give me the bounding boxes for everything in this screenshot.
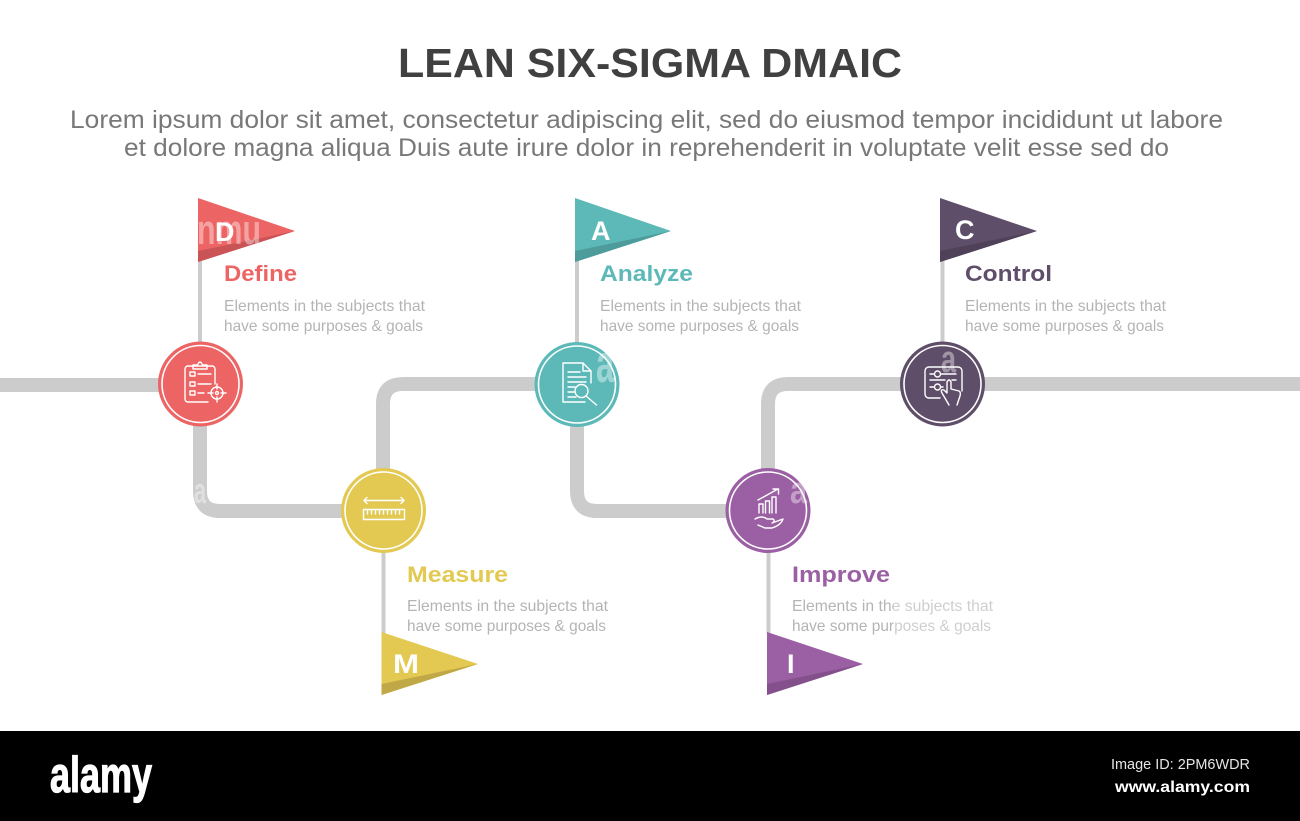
step: Measure (341, 468, 609, 695)
flag: D: nmu (197, 206, 261, 253)
subtitle text (70, 106, 1223, 162)
description: Define: Elements in the subjects that (224, 298, 426, 315)
watermark letter: Improve: a (790, 470, 808, 512)
flag: D: D (215, 217, 234, 247)
step: Control (900, 198, 1167, 426)
footer logo: alamy (50, 747, 152, 803)
watermark letter: Control: a (941, 339, 957, 381)
circle: Measure (341, 468, 426, 553)
heading: Measure: Measure (407, 562, 508, 587)
flag: C (940, 198, 1037, 262)
description: Measure (407, 598, 609, 635)
flag: C: C (955, 215, 974, 245)
description: Measure: Elements in the subjects that (407, 598, 609, 615)
heading: Improve: Improve (792, 562, 890, 587)
circle: Improve (726, 468, 810, 553)
description: Analyze: Elements in the subjects that (600, 298, 802, 315)
flag: M (382, 632, 478, 695)
faded watermark patch over Improve text (893, 597, 995, 637)
step: Analyze (534, 198, 802, 427)
description: Define: have some purposes & goals (224, 318, 423, 335)
icon: ruler with arrow (364, 498, 404, 520)
icon: touch control panel (925, 367, 962, 405)
description: Define (224, 298, 426, 335)
flag: D (197, 198, 295, 262)
footer band (0, 731, 1300, 821)
flag: I (767, 632, 863, 695)
watermark letter: Analyze: a (596, 334, 615, 394)
icon: growth chart on hand (755, 489, 783, 528)
circle: Define (158, 342, 243, 426)
flag: M: M (393, 649, 419, 679)
description: Control: Elements in the subjects that (965, 298, 1167, 315)
description: Analyze: have some purposes & goals (600, 318, 799, 335)
description: Measure: have some purposes & goals (407, 618, 606, 635)
description: Control: have some purposes & goals (965, 318, 1164, 335)
flag: A (575, 198, 671, 262)
flag: A: A (591, 216, 610, 246)
subtitle text: et dolore magna aliqua Duis aute irure dolor in reprehenderit in voluptate velit esse sed do (124, 134, 1169, 162)
description: Improve (792, 598, 994, 635)
description: Control (965, 298, 1167, 335)
heading: Analyze: Analyze (600, 261, 693, 286)
heading: Define: Define (224, 261, 297, 286)
description: Improve: Elements in the subjects that (792, 598, 994, 615)
circle: Control (900, 342, 985, 426)
watermark letter: on path: a (194, 470, 207, 511)
winding process path (0, 384, 1300, 511)
subtitle text: Lorem ipsum dolor sit amet, consectetur adipiscing elit, sed do eiusmod tempor incididunt ut labore (70, 106, 1223, 134)
icon: document with magnifier (563, 363, 596, 405)
icon: clipboard with target (185, 362, 226, 402)
footer url: www.alamy.com (1114, 779, 1250, 796)
step: Define (158, 198, 426, 426)
flag: I: I (787, 649, 795, 679)
title: LEAN SIX-SIGMA DMAIC (398, 40, 902, 86)
step: Improve (726, 468, 995, 695)
description: Improve: have some purposes & goals (792, 618, 991, 635)
heading: Control: Control (965, 261, 1052, 286)
footer image id: Image ID: 2PM6WDR (1111, 756, 1250, 773)
description: Analyze (600, 298, 802, 335)
circle: Analyze (534, 342, 620, 427)
